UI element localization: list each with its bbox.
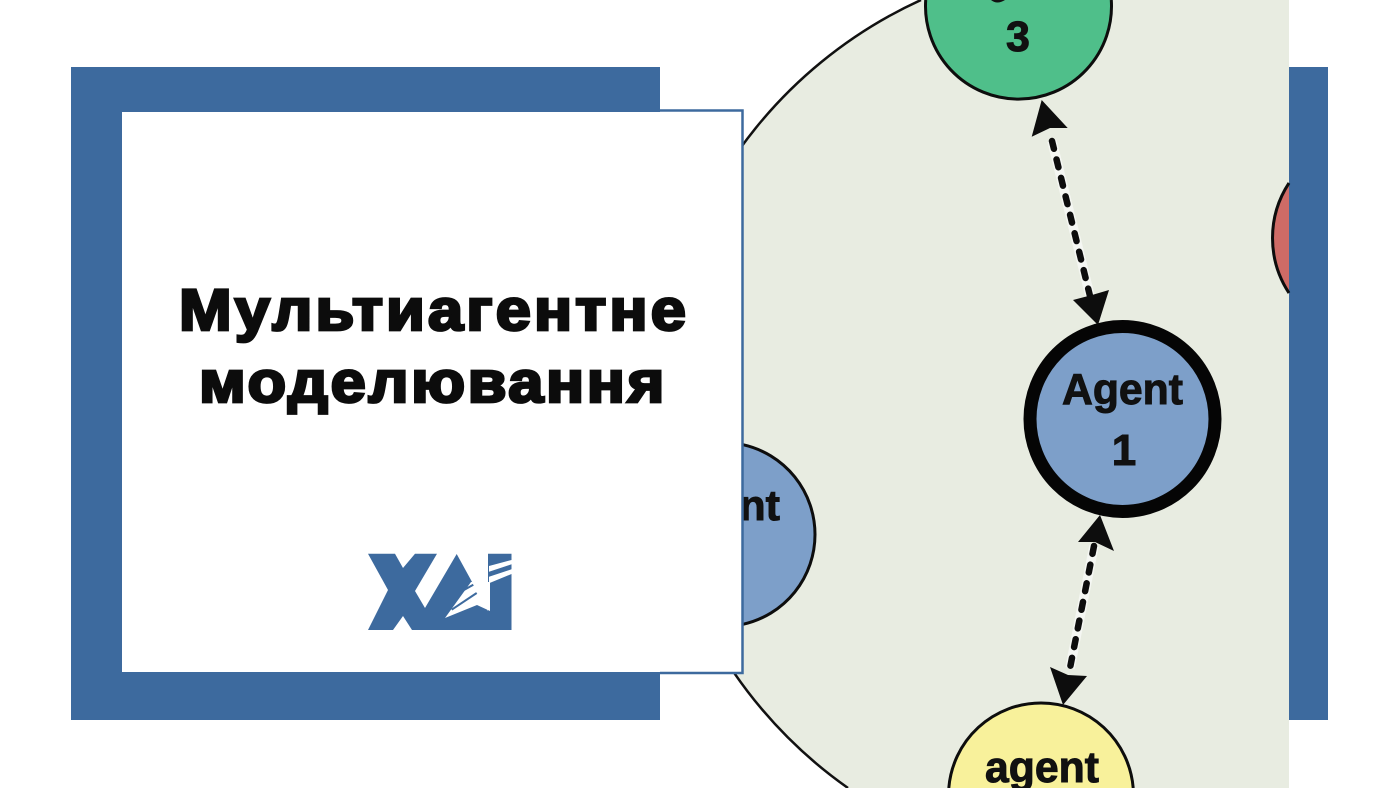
agent 3 node bbox=[926, 0, 1112, 99]
yellow agent node bbox=[949, 703, 1133, 788]
agent 1 node bbox=[1030, 326, 1215, 512]
arrow: agent 1 to yellow agent bbox=[1050, 515, 1114, 705]
title: Мультиагентне bbox=[179, 277, 686, 342]
white title panel bbox=[122, 110, 742, 674]
agent 1 node: 1 bbox=[1112, 426, 1136, 475]
title: моделювання bbox=[199, 349, 664, 414]
left blue frame bbox=[71, 67, 660, 720]
red agent node bbox=[1273, 183, 1289, 293]
left blue agent node: nt bbox=[739, 482, 780, 530]
agent 3 node: 3 bbox=[1006, 13, 1030, 61]
arrow: agent 1 to agent 3 bbox=[1032, 100, 1109, 325]
agent 1 node: Agent bbox=[1062, 365, 1183, 414]
logo: XAI bbox=[368, 554, 512, 630]
panel border bbox=[660, 110, 742, 673]
environment circle outline bbox=[654, 0, 921, 788]
right blue bar bbox=[1289, 67, 1328, 720]
environment circle bbox=[654, 0, 1289, 788]
left blue agent node bbox=[739, 445, 815, 624]
agent network diagram bbox=[654, 0, 1289, 788]
title bbox=[179, 277, 686, 414]
